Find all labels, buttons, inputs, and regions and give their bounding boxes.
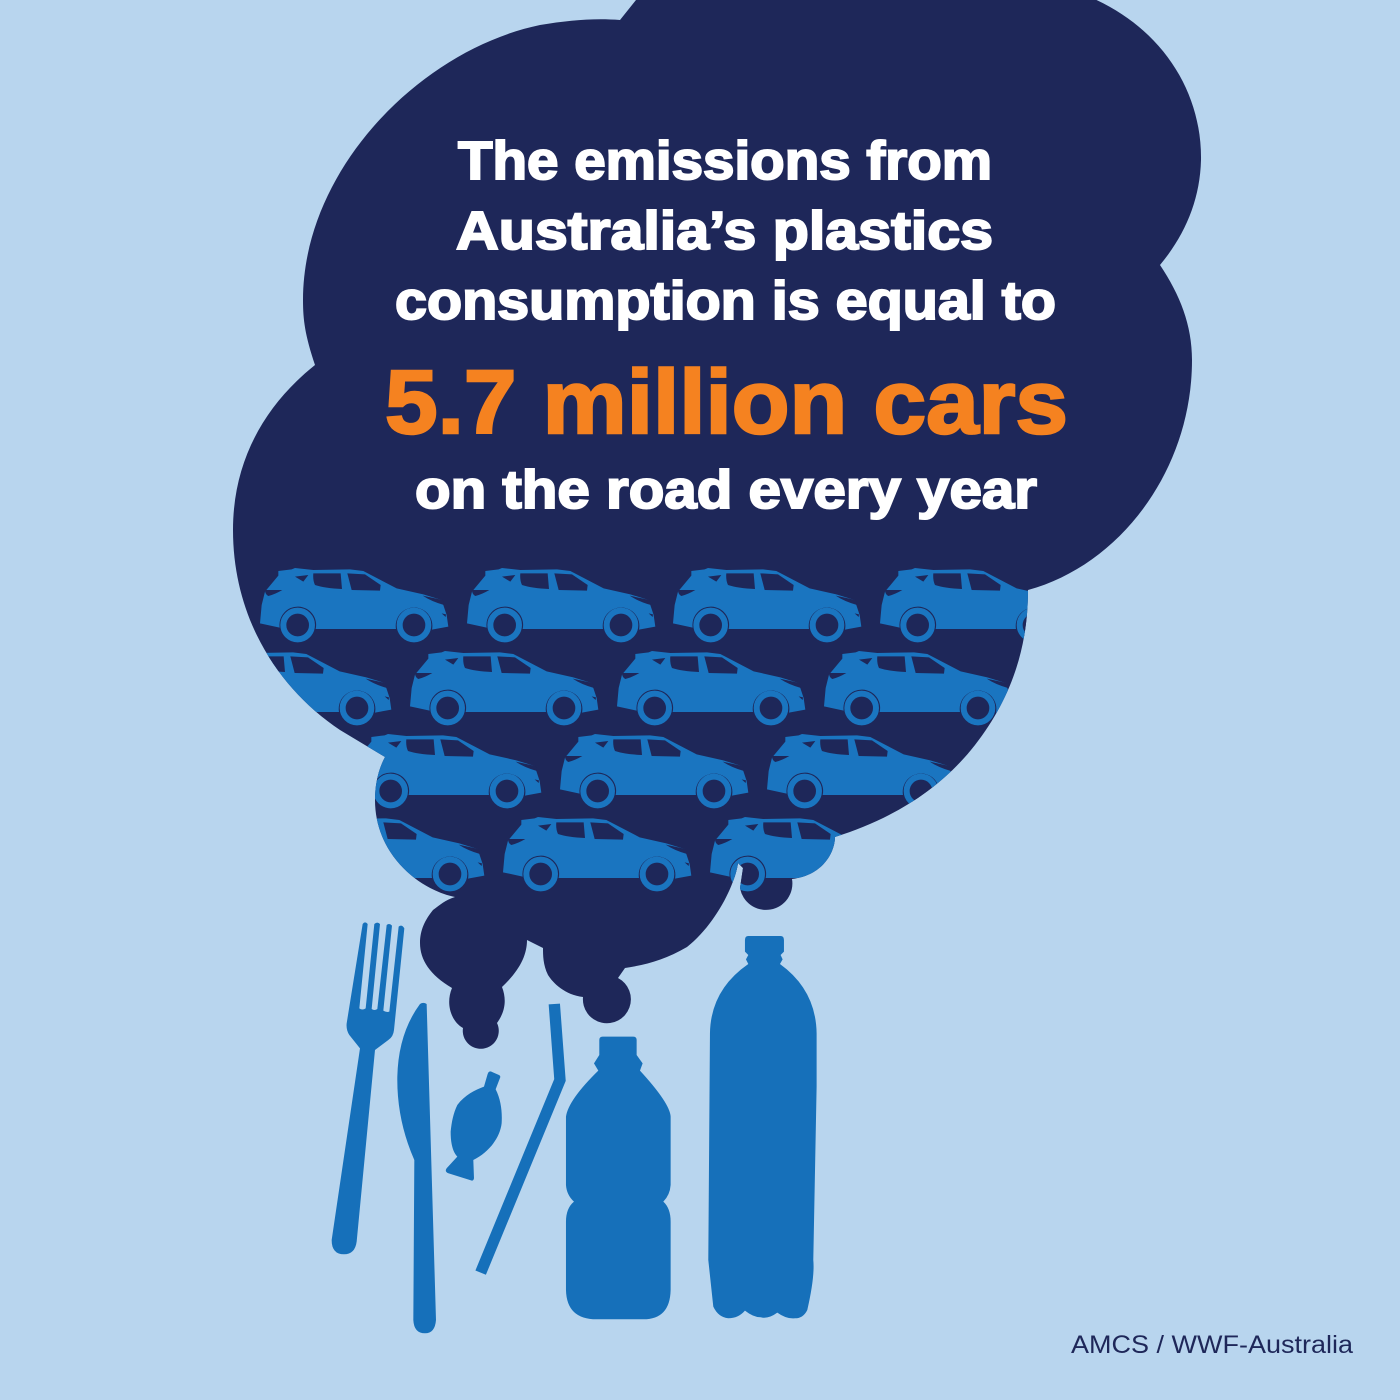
icon: straw xyxy=(481,1004,560,1273)
smoke cloud xyxy=(233,0,1201,1049)
pattern of cars inside the cloud xyxy=(260,568,1028,892)
highlighted figure: 5.7 million cars xyxy=(385,353,1068,453)
headline text: Australia’s plastics xyxy=(456,201,993,261)
source credit: AMCS / WWF-Australia xyxy=(1071,1331,1353,1359)
headline text: on the road every year xyxy=(415,460,1037,520)
icon: knife xyxy=(397,1003,436,1333)
icon: wrapped fish sauce bottle xyxy=(446,1071,502,1181)
headline text: consumption is equal to xyxy=(395,271,1056,331)
headline text xyxy=(385,131,1068,520)
icon: small bottle xyxy=(566,1037,671,1319)
icon: fork xyxy=(332,922,404,1254)
plastic items xyxy=(332,922,817,1333)
icon: large bottle xyxy=(708,936,817,1318)
headline text: The emissions from xyxy=(458,131,992,191)
